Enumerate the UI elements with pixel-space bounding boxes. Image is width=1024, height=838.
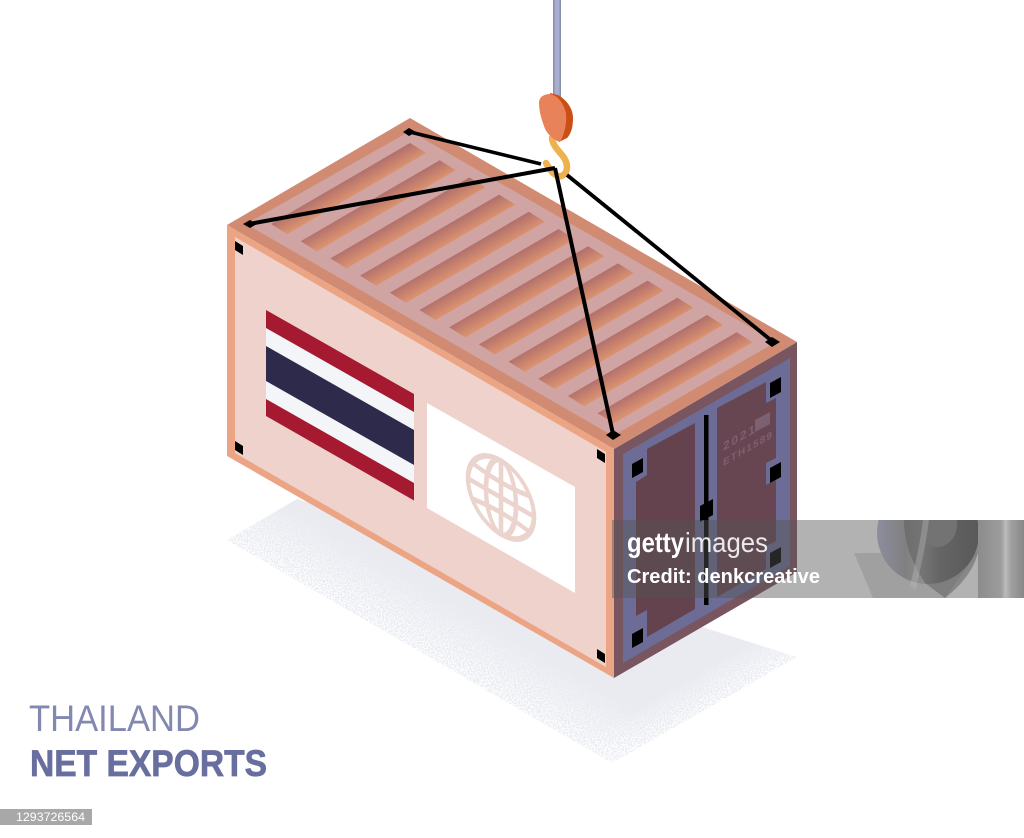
title line: country: THAILAND bbox=[29, 698, 200, 739]
door serial number bbox=[723, 412, 772, 469]
ground shadow bbox=[227, 499, 797, 763]
watermark logo: images bbox=[685, 527, 768, 558]
watermark logo bbox=[628, 532, 768, 558]
container left side bbox=[227, 225, 614, 678]
crane hook bbox=[539, 93, 573, 176]
title line: topic: NET EXPORTS bbox=[30, 743, 267, 784]
lifting straps bbox=[243, 128, 780, 440]
door serial number: 2021 bbox=[723, 421, 755, 454]
white globe panel bbox=[427, 403, 575, 593]
Thai flag bbox=[266, 310, 414, 500]
title bbox=[29, 698, 267, 784]
container door end bbox=[614, 342, 797, 678]
door bar and handle bbox=[700, 415, 713, 605]
watermark logo: getty bbox=[627, 527, 684, 558]
watermark credit: Credit: denkcreative bbox=[627, 566, 820, 588]
door corner locks bbox=[632, 377, 781, 648]
watermark band bbox=[612, 520, 1024, 598]
crane cable bbox=[553, 0, 561, 98]
right door panel bbox=[717, 382, 776, 597]
image id badge bbox=[0, 809, 92, 825]
globe icon bbox=[468, 441, 534, 554]
shipping container bbox=[227, 118, 797, 678]
container roof bbox=[227, 118, 797, 449]
image id badge: 1293726564 bbox=[16, 810, 85, 824]
door serial number: ETH1589 bbox=[723, 429, 772, 469]
left door panel bbox=[636, 423, 695, 637]
roof corrugation stripes bbox=[271, 143, 753, 423]
watermark abstract shapes bbox=[854, 520, 1024, 598]
